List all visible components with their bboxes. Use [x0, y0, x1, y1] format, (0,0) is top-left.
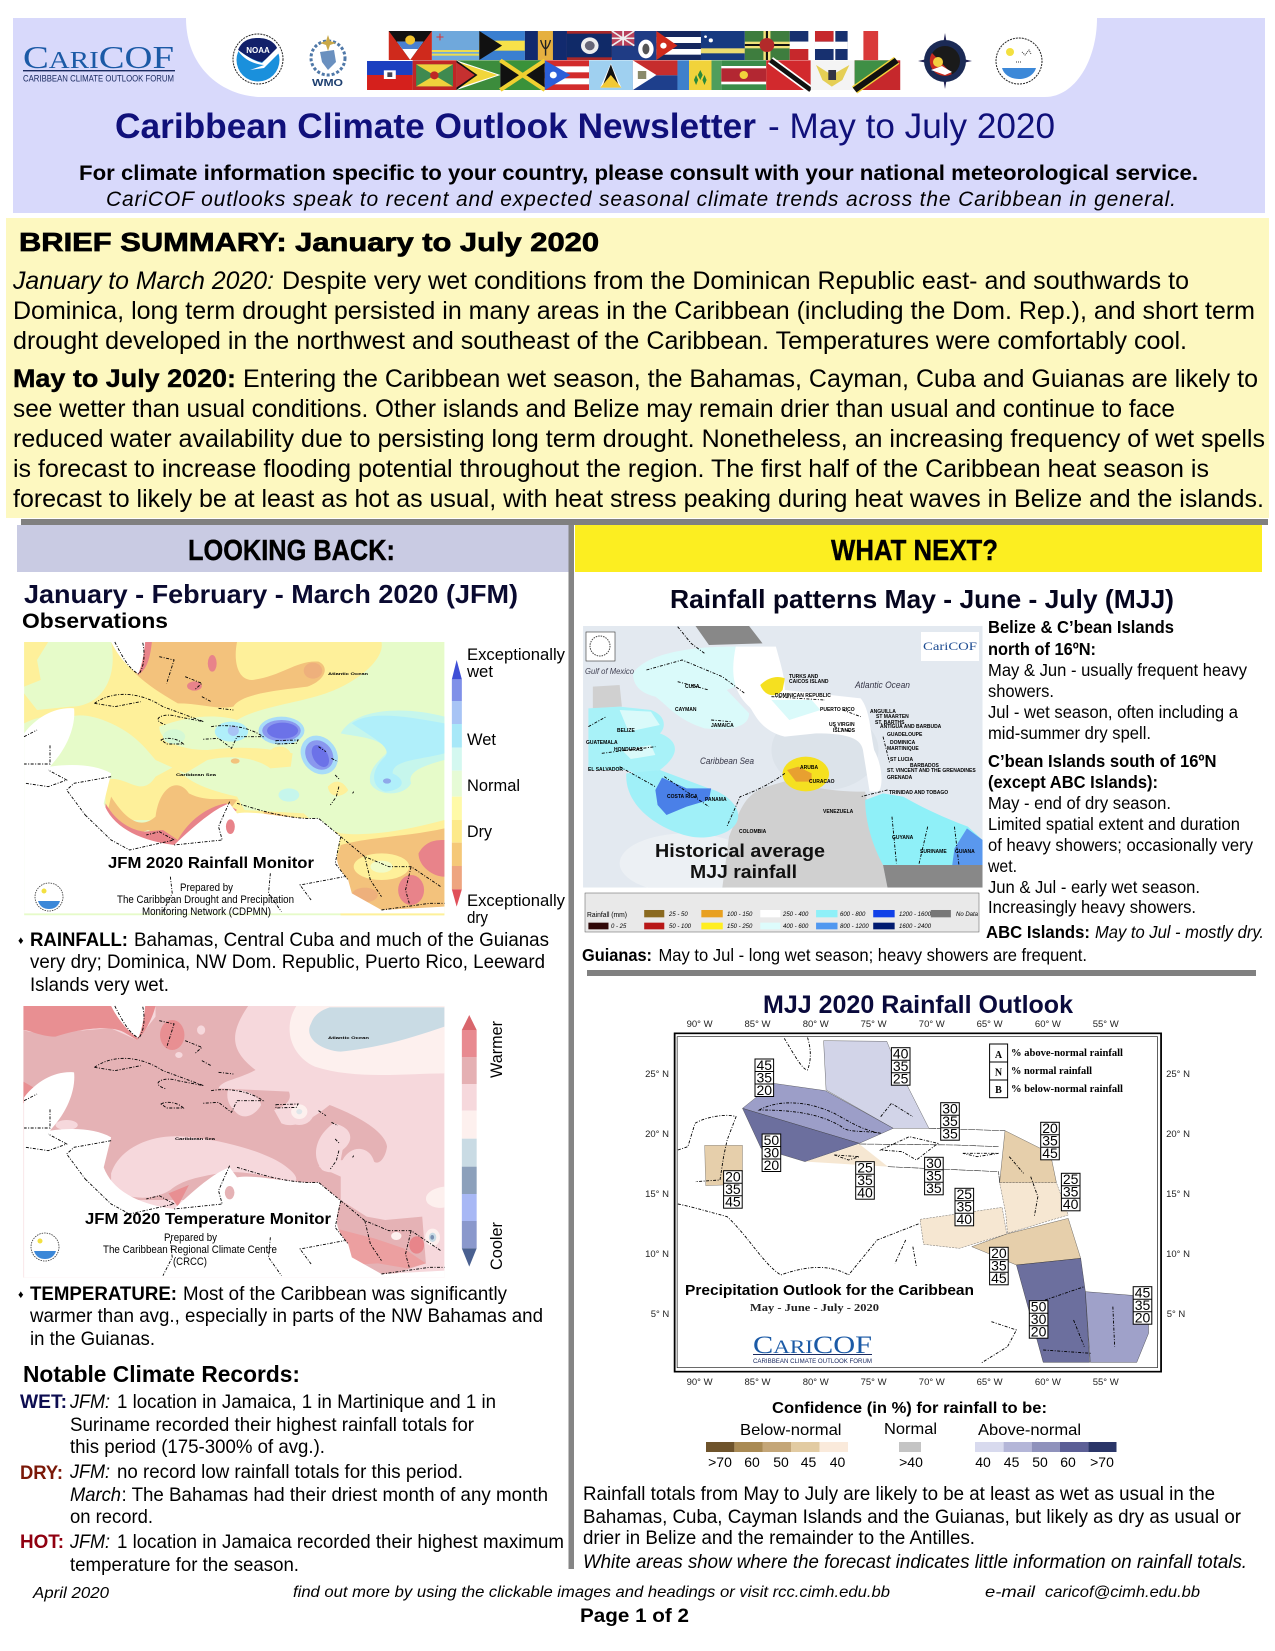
chart: historical average rainfall map: ISLANDS: [833, 728, 856, 734]
legend: confidence scale: [706, 1400, 1116, 1470]
probability boxes: 35: [957, 1199, 972, 1215]
text block: southern islands: (except ABC Islands):: [988, 772, 1158, 792]
logo: meteorological organisation compass: [918, 33, 972, 89]
map axis labels: 15° N: [645, 1189, 669, 1200]
map axis labels: 75° W: [861, 1019, 887, 1030]
text block: May to July 2020: see wetter than usual conditions. Other islands and Belize may remain drier than usual and continue to face: [13, 395, 1175, 423]
footer: caricof@cimh.edu.bb: [1045, 1584, 1200, 1601]
probability boxes: 30: [942, 1100, 958, 1116]
logo: CariCOF: CARIBBEAN CLIMATE OUTLOOK FORUM: [23, 74, 174, 84]
record: wet: this period (175-300% of avg.).: [70, 1436, 325, 1458]
legend: confidence scale: Below-normal: [740, 1422, 842, 1439]
chart: historical average rainfall map: MARTINIQUE: [887, 746, 919, 752]
footer: find out more by using the clickable images and headings or visit rcc.cimh.edu.bb: [293, 1584, 890, 1601]
map axis labels: 70° W: [919, 1019, 945, 1030]
heading: looking back: [17, 525, 568, 572]
legend: confidence scale: 60: [744, 1454, 760, 1470]
legend: rainfall colour bar: [452, 645, 565, 927]
map credit: temperature monitor: [103, 1232, 277, 1268]
chart: MJJ rainfall outlook map: [645, 1019, 1190, 1388]
map axis labels: [645, 1019, 1190, 1388]
chart: historical average rainfall map: ANGUILLA: [870, 709, 896, 715]
footer: [32, 1584, 1200, 1627]
text block: May to July 2020: is forecast to increase flooding potential throughout the region. The first half of the Caribbean heat season is: [13, 455, 1209, 483]
chart: historical average rainfall map: GUYANA: [892, 835, 914, 841]
record: dry: no record low rainfall totals for this period.: [117, 1461, 463, 1483]
map axis labels: 85° W: [745, 1377, 771, 1388]
probability boxes: 35: [926, 1168, 942, 1184]
title: [115, 107, 1055, 146]
legend: temperature colour bar: Cooler: [487, 1222, 506, 1270]
record: dry: [20, 1461, 548, 1528]
legend: confidence scale: Confidence (in %) for rainfall to be:: [772, 1400, 1047, 1417]
chart: historical average rainfall map: ST. BARTHS: [875, 720, 905, 726]
panel: what next: [575, 525, 1264, 1573]
record: hot: JFM:: [69, 1531, 110, 1553]
legend: confidence scale: >70: [708, 1454, 732, 1470]
probability boxes: 35: [1063, 1184, 1079, 1200]
legend: rainfall mm: [585, 893, 979, 932]
chart: historical average rainfall map: US VIRGIN: [829, 722, 855, 728]
map credit: rainfall monitor: [117, 882, 294, 918]
logo: WMO: WMO: [312, 78, 343, 89]
chart: historical average rainfall map: ST MAARTEN: [876, 714, 909, 720]
map credit: temperature monitor: The Caribbean Regional Climate Centre: [103, 1244, 277, 1256]
probability boxes: 30: [764, 1144, 779, 1160]
map key: A N B: N: [995, 1068, 1003, 1078]
text block: rainfall summary: Islands very wet.: [30, 974, 169, 996]
legend: confidence scale: 50: [773, 1454, 789, 1470]
chart: historical average rainfall map: JAMAICA: [711, 723, 734, 729]
text block: temperature summary: warmer than avg., especially in parts of the NW Bahamas and: [29, 1305, 543, 1327]
legend: rainfall mm: Rainfall (mm): [587, 912, 627, 919]
chart: historical average rainfall map: Caribbean Sea: [700, 756, 754, 766]
record: wet: [20, 1391, 496, 1458]
probability boxes: 35: [1135, 1297, 1150, 1313]
map axis labels: 80° W: [803, 1019, 829, 1030]
text block: outlook explanation: Bahamas, Cuba, Cayman Islands and the Guianas, but likely as dry as usual or: [583, 1506, 1241, 1528]
legend: rainfall colour bar: Exceptionally: [467, 645, 565, 664]
record: wet: Suriname recorded their highest rainfall totals for: [70, 1414, 474, 1436]
chart: temperature monitor map: [23, 1006, 444, 1278]
legend: temperature colour bar: [462, 1015, 506, 1270]
probability boxes: 20: [757, 1082, 772, 1098]
map axis labels: 15° N: [1166, 1189, 1190, 1200]
legend: rainfall colour bar: Wet: [467, 730, 496, 749]
chart: historical average rainfall map: GUATEMALA: [586, 740, 618, 746]
probability boxes: 30: [1031, 1311, 1047, 1327]
legend: rainfall mm: 150 - 250: [727, 924, 753, 930]
chart: historical average rainfall map: CAICOS ISLAND: [789, 679, 829, 685]
map axis labels: 70° W: [919, 1377, 945, 1388]
text block: rainfall summary: ♦: [18, 935, 24, 947]
text block: southern islands: of heavy showers; occasionally very: [988, 835, 1253, 855]
text block: temperature summary: TEMPERATURE:: [30, 1283, 177, 1305]
map title: historical average: MJJ rainfall: [690, 862, 797, 882]
map key: A N B: [990, 1044, 1123, 1098]
text block: May to July 2020: Entering the Caribbean wet season, the Bahamas, Cayman, Cuba and Guianas are likely to: [243, 365, 1258, 393]
chart: historical average rainfall map: [583, 626, 983, 893]
probability boxes: 25: [857, 1159, 873, 1175]
probability boxes: 35: [1042, 1133, 1058, 1149]
footer: April 2020: [32, 1585, 109, 1602]
chart: historical average rainfall map: ANTIGUA AND BARBUDA: [880, 724, 942, 730]
probability boxes: 45: [1042, 1145, 1058, 1161]
chart: historical average rainfall map: PANAMA: [705, 797, 727, 803]
chart: temperature monitor map: Atlantic Ocean: [328, 1035, 370, 1040]
probability boxes: 35: [757, 1069, 772, 1085]
logo: small CDPMN: [31, 1233, 59, 1261]
chart: historical average rainfall map: CariCOF: [923, 639, 977, 653]
heading: JFM: January - February - March 2020 (JFM): [24, 579, 518, 609]
map key: A N B: B: [995, 1085, 1002, 1096]
text block: May to July 2020: [13, 365, 1265, 513]
map axis labels: 20° N: [645, 1129, 669, 1140]
legend: rainfall mm: 800 - 1200: [840, 924, 869, 930]
text block: rainfall summary: RAINFALL:: [30, 929, 128, 951]
record: dry: JFM:: [69, 1461, 110, 1483]
title: - May to July 2020: [768, 107, 1055, 146]
chart: historical average rainfall map: Gulf of Mexico: [585, 667, 635, 676]
probability boxes: 40: [857, 1184, 873, 1200]
text block: rainfall summary: Bahamas, Central Cuba and much of the Guianas: [134, 929, 549, 951]
legend: rainfall mm: 1600 - 2400: [899, 924, 932, 930]
probability boxes: 20: [1042, 1120, 1058, 1136]
panel: brief summary: [6, 218, 1269, 518]
chart: historical average rainfall map: TURKS AND: [789, 674, 819, 680]
legend: rainfall mm: 250 - 400: [782, 912, 809, 918]
probability boxes: 50: [764, 1132, 779, 1148]
heading: rainfall outlook: MJJ 2020 Rainfall Outlook: [763, 991, 1073, 1019]
record: hot: HOT:: [20, 1531, 64, 1553]
probability boxes: 30: [926, 1155, 942, 1171]
text block: southern islands: [987, 751, 1253, 917]
legend: confidence scale: Normal: [884, 1421, 937, 1438]
record: wet: 1 location in Jamaica, 1 in Martinique and 1 in: [117, 1391, 496, 1413]
map axis labels: 65° W: [977, 1377, 1003, 1388]
text block: ABC islands: ABC Islands:: [986, 922, 1090, 942]
probability boxes: 40: [1063, 1196, 1079, 1212]
chart: historical average rainfall map: Atlantic Ocean: [854, 680, 910, 690]
text block: Belize and northern islands: Belize & C’bean Islands: [988, 617, 1174, 637]
chart: historical average rainfall map: GRENADA: [887, 775, 913, 781]
flags: [367, 31, 900, 90]
text block: January to March 2020: drought developed in the northwest and southeast of the Caribbean. Temperatures were comfortably cool.: [13, 327, 1187, 355]
legend: rainfall colour bar: dry: [467, 908, 488, 927]
probability boxes: 25: [957, 1186, 972, 1202]
text block: temperature summary: Most of the Caribbean was significantly: [183, 1283, 507, 1305]
legend: rainfall mm: 0 - 25: [611, 924, 627, 930]
map title: precipitation outlook: [685, 1282, 974, 1314]
record: hot: temperature for the season.: [70, 1554, 299, 1576]
chart: historical average rainfall map: DOMINICA: [890, 740, 916, 746]
legend: rainfall mm: 50 - 100: [669, 924, 692, 930]
legend: confidence scale: 45: [1004, 1454, 1020, 1470]
map title: historical average: Historical average: [655, 841, 825, 861]
chart: historical average rainfall map: EL SALVADOR: [588, 767, 623, 773]
text block: January to March 2020: Dominica, long term drought persisted in many areas in the Caribbean (including the Dom. Rep.), and short term: [13, 297, 1255, 325]
probability boxes: 45: [991, 1270, 1007, 1286]
heading: what next: [575, 525, 1262, 572]
logo: CariCOF map: CARI COF: [753, 1332, 872, 1359]
chart: historical average rainfall map: VENEZUELA: [823, 809, 854, 815]
map title: historical average: [655, 841, 825, 882]
map key: A N B: % below-normal rainfall: [1011, 1084, 1123, 1095]
probability boxes: 35: [942, 1113, 958, 1129]
text block: rainfall summary: very dry; Dominica, NW Dom. Republic, Puerto Rico, Leeward: [30, 951, 545, 973]
text block: outlook explanation: [583, 1483, 1247, 1573]
map axis labels: 65° W: [977, 1019, 1003, 1030]
map axis labels: 60° W: [1035, 1019, 1061, 1030]
logo: CariCOF: CARI COF: [23, 39, 174, 75]
text block: outlook explanation: White areas show where the forecast indicates little information on rainfall totals.: [583, 1551, 1247, 1573]
legend: rainfall mm: 400 - 600: [783, 924, 809, 930]
probability boxes: 20: [725, 1168, 741, 1184]
map axis labels: 10° N: [1166, 1249, 1190, 1260]
text block: temperature summary: ♦: [18, 1289, 24, 1301]
footer: e-mail: [985, 1584, 1036, 1601]
legend: rainfall mm: No Data: [956, 912, 979, 918]
legend: confidence scale: >70: [1090, 1454, 1114, 1470]
logo: CariCOF map: CARIBBEAN CLIMATE OUTLOOK FORUM: [753, 1358, 872, 1365]
text block: southern islands: Increasingly heavy showers.: [988, 897, 1196, 917]
record: dry: on record.: [70, 1506, 153, 1528]
text block: Belize and northern islands: May & Jun - usually frequent heavy: [988, 660, 1247, 680]
probability boxes: 25: [1063, 1171, 1079, 1187]
advisory: outlook scope: CariCOF outlooks speak to recent and expected seasonal climate trends across the Caribbean in general.: [106, 188, 1176, 211]
chart: historical average rainfall map: COLOMBIA: [739, 829, 767, 835]
probability boxes: 35: [857, 1172, 873, 1188]
heading: brief summary: BRIEF SUMMARY: January to July 2020: [19, 227, 599, 257]
chart: historical average rainfall map: SURINAME: [920, 849, 947, 855]
map axis labels: 5° N: [1167, 1309, 1185, 1320]
probability boxes: 45: [1135, 1284, 1150, 1300]
text block: January to March 2020: Despite very wet conditions from the Dominican Republic east- and southwards to: [282, 267, 1189, 295]
chart: historical average rainfall map: BARBADOS: [910, 763, 940, 769]
probability boxes: 35: [942, 1125, 958, 1141]
chart: historical average rainfall map: ARUBA: [800, 765, 818, 771]
record: dry: March: [70, 1484, 121, 1506]
map credit: temperature monitor: (CRCC): [173, 1256, 207, 1268]
record: wet: WET:: [20, 1391, 67, 1413]
probability boxes: 20: [1031, 1323, 1047, 1339]
probability boxes: 20: [1135, 1309, 1150, 1325]
legend: rainfall mm: 25 - 50: [668, 912, 688, 918]
map axis labels: 55° W: [1093, 1377, 1119, 1388]
chart: historical average rainfall map: ST. VINCENT AND THE GRENADINES: [887, 768, 976, 774]
map title: rainfall monitor: JFM 2020 Rainfall Monitor: [108, 855, 314, 872]
text block: Belize and northern islands: Jul - wet season, often including a: [988, 702, 1238, 722]
chart: historical average rainfall map: CUBA: [685, 684, 700, 690]
map credit: rainfall monitor: Prepared by: [180, 882, 233, 894]
text block: temperature summary: in the Guianas.: [30, 1328, 155, 1350]
chart: historical average rainfall map: GUADELOUPE: [887, 732, 923, 738]
chart: historical average rainfall map: CURACAO: [809, 779, 835, 785]
text block: May to July 2020: May to July 2020:: [13, 365, 236, 393]
text block: southern islands: May - end of dry season.: [988, 793, 1171, 813]
text block: Belize and northern islands: mid-summer dry spell.: [988, 723, 1151, 743]
text block: May to July 2020: forecast to likely be at least as hot as usual, with heat stress peaking during heat waves in Belize and the islands.: [13, 485, 1264, 513]
probability boxes: 40: [957, 1211, 972, 1227]
legend: confidence scale: 40: [975, 1454, 991, 1470]
text block: Guianas: May to Jul - long wet season; heavy showers are frequent.: [658, 945, 1087, 965]
chart: historical average rainfall map: HONDURAS: [614, 747, 644, 753]
text block: southern islands: Jun & Jul - early wet season.: [988, 877, 1200, 897]
chart: historical average rainfall map: CAYMAN: [675, 707, 697, 713]
map key: A N B: % normal rainfall: [1011, 1066, 1092, 1077]
chart: historical average rainfall map: ST LUCIA: [890, 757, 913, 763]
map axis labels: 60° W: [1035, 1377, 1061, 1388]
probability boxes: 20: [764, 1157, 779, 1173]
legend: confidence scale: >40: [899, 1454, 923, 1470]
map title: temperature monitor: JFM 2020 Temperature Monitor: [85, 1211, 331, 1228]
text block: January to March 2020: January to March 2020:: [12, 267, 274, 295]
advisory: consult national service: For climate information specific to your country, please consult with your national meteorological service.: [79, 162, 1198, 185]
logo: NOAA: NOAA: [246, 46, 270, 55]
map axis labels: 85° W: [745, 1019, 771, 1030]
probability boxes: 40: [893, 1045, 909, 1061]
map title: precipitation outlook: Precipitation Outlook for the Caribbean: [685, 1282, 974, 1299]
chart: temperature monitor map: Caribbean Sea: [175, 1136, 216, 1141]
map title: precipitation outlook: May - June - July - 2020: [750, 1302, 880, 1314]
map key: A N B: % above-normal rainfall: [1011, 1048, 1123, 1059]
heading: looking back: LOOKING BACK:: [188, 535, 395, 567]
chart: rainfall monitor map: Caribbean Sea: [176, 772, 217, 777]
text block: Guianas: Guianas:: [582, 945, 652, 965]
legend: confidence scale: 40: [830, 1454, 845, 1470]
probability boxes: 20: [991, 1245, 1007, 1261]
text block: southern islands: Limited spatial extent and duration: [988, 814, 1240, 834]
map credit: temperature monitor: Prepared by: [164, 1232, 217, 1244]
map key: A N B: A: [995, 1050, 1003, 1061]
chart: historical average rainfall map: TRINIDAD AND TOBAGO: [889, 790, 948, 796]
footer: Page 1 of 2: [580, 1606, 689, 1627]
subheading: observations: Observations: [22, 610, 168, 633]
chart: historical average rainfall map: DOMINICAN REPUBLIC: [775, 693, 831, 699]
probability boxes: 25: [893, 1070, 909, 1086]
probability boxes: 45: [757, 1057, 772, 1073]
record: hot: 1 location in Jamaica recorded their highest maximum: [117, 1531, 564, 1553]
legend: temperature colour bar: Warmer: [487, 1021, 506, 1078]
map axis labels: 25° N: [645, 1069, 669, 1080]
map axis labels: 25° N: [1166, 1069, 1190, 1080]
map credit: rainfall monitor: The Caribbean Drought and Precipitation: [117, 894, 294, 906]
probability boxes: 50: [1031, 1298, 1047, 1314]
map axis labels: 90° W: [687, 1377, 713, 1388]
map axis labels: 80° W: [803, 1377, 829, 1388]
legend: rainfall colour bar: wet: [466, 662, 493, 681]
legend: rainfall mm: 600 - 800: [840, 912, 866, 918]
map axis labels: 10° N: [645, 1249, 669, 1260]
chart: historical average rainfall map: PUERTO RICO: [820, 707, 855, 713]
probability boxes: 45: [725, 1193, 741, 1209]
text block: January to March 2020: [12, 267, 1255, 355]
heading: notable climate records: Notable Climate Records:: [23, 1361, 300, 1387]
map axis labels: 5° N: [651, 1309, 669, 1320]
record: dry: DRY:: [20, 1462, 63, 1484]
chart: rainfall monitor map: Atlantic Ocean: [328, 671, 369, 676]
probability boxes: 35: [926, 1180, 942, 1196]
text block: outlook explanation: drier in Belize and the remainder to the Antilles.: [583, 1527, 975, 1549]
chart: historical average rainfall map: BELIZE: [617, 728, 635, 734]
heading: what next: WHAT NEXT?: [831, 535, 998, 567]
legend: confidence scale: 50: [1032, 1454, 1048, 1470]
probability boxes: 35: [725, 1181, 741, 1197]
title: Caribbean Climate Outlook Newsletter: [115, 107, 756, 146]
legend: rainfall colour bar: Normal: [467, 776, 520, 795]
text block: May to July 2020: reduced water availability due to persisting long term drought. Nonetheless, an increasing frequency of wet spells: [13, 425, 1265, 453]
legend: rainfall mm: 100 - 150: [727, 912, 753, 918]
heading: rainfall patterns: Rainfall patterns May - June - July (MJJ): [670, 584, 1174, 614]
probability boxes: [724, 1046, 1152, 1340]
legend: confidence scale: Above-normal: [978, 1422, 1081, 1439]
text block: Belize and northern islands: showers.: [988, 681, 1054, 701]
chart: historical average rainfall map: GUIANA: [955, 849, 975, 855]
text block: ABC islands: May to Jul - mostly dry.: [1095, 922, 1264, 942]
text block: southern islands: wet.: [987, 856, 1017, 876]
legend: rainfall colour bar: Dry: [467, 822, 492, 841]
map axis labels: 20° N: [1166, 1129, 1190, 1140]
record: dry: : The Bahamas had their driest month of any month: [122, 1484, 548, 1506]
legend: confidence scale: 45: [801, 1454, 816, 1470]
map axis labels: 75° W: [861, 1377, 887, 1388]
logo: NOAA: [233, 34, 283, 84]
record: wet: JFM:: [69, 1391, 110, 1413]
probability boxes: 35: [991, 1258, 1007, 1274]
chart: rainfall monitor map: [24, 642, 444, 918]
map credit: rainfall monitor: Monitoring Network (CDPMN): [142, 906, 271, 918]
text block: temperature summary: [18, 1283, 543, 1350]
legend: rainfall mm: 1200 - 1600: [899, 912, 932, 918]
text block: Belize and northern islands: [988, 617, 1247, 743]
text block: ABC islands: [986, 922, 1264, 942]
logo: CDPMN: [996, 38, 1042, 84]
text block: southern islands: C’bean Islands south of 16ºN: [988, 751, 1216, 771]
logo: WMO: [311, 35, 345, 89]
legend: rainfall colour bar: Exceptionally: [467, 891, 565, 910]
text block: outlook explanation: Rainfall totals from May to July are likely to be at least as wet as usual in the: [583, 1483, 1215, 1505]
map axis labels: 90° W: [687, 1019, 713, 1030]
map axis labels: 55° W: [1093, 1019, 1119, 1030]
chart: historical average rainfall map: COSTA RICA: [667, 794, 698, 800]
probability boxes: 35: [893, 1058, 909, 1074]
header band: [13, 18, 1265, 213]
text block: Belize and northern islands: north of 16ºN:: [988, 639, 1096, 659]
record: hot: [20, 1531, 564, 1576]
logo: small CDPMN: [35, 883, 63, 911]
panel: looking back: [17, 525, 568, 1576]
text block: rainfall summary: [18, 929, 549, 996]
legend: confidence scale: 60: [1060, 1454, 1076, 1470]
